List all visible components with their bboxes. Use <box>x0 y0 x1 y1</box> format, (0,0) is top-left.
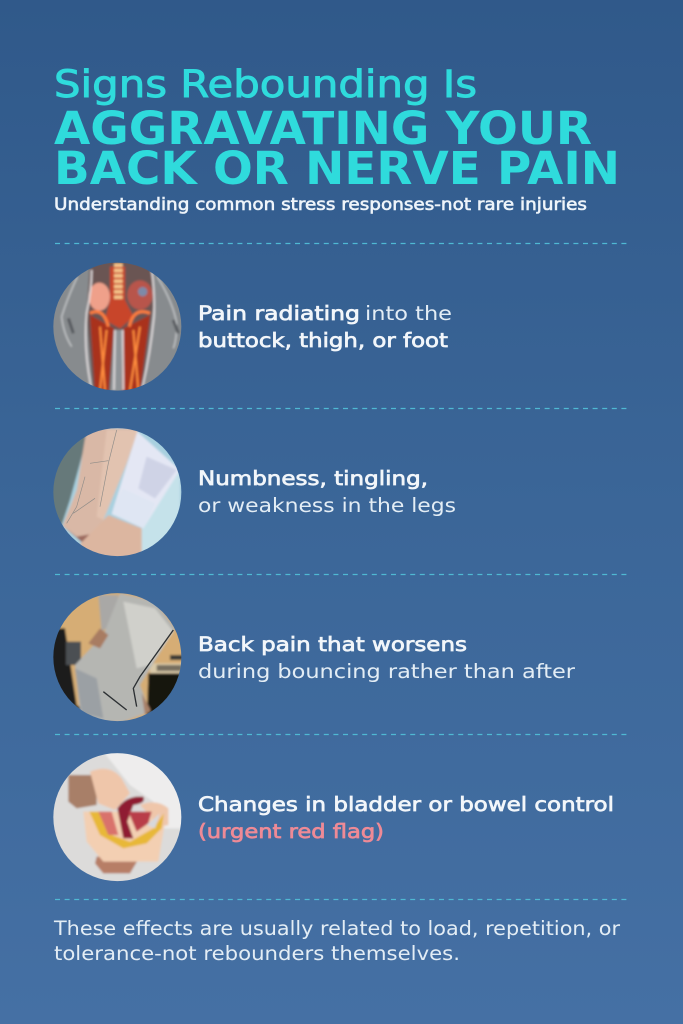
text: Back pain that worsens: Back pain that worsens <box>198 633 467 656</box>
footer line 1: These effects are usually related to load, repetition, or <box>53 917 621 940</box>
icon: leg with compression sleeve photo <box>50 427 187 560</box>
item 2: numbness <box>50 427 456 560</box>
item 4: bladder or bowel <box>50 752 614 885</box>
item 3: back pain <box>50 592 576 725</box>
icon: pelvis and legs x-ray photo <box>50 260 187 393</box>
subtitle: Understanding common stress responses-not rare injuries <box>54 195 587 214</box>
item 2 text <box>198 467 456 517</box>
text: Numbness, tingling,: Numbness, tingling, <box>198 467 428 490</box>
item 1 text <box>198 302 452 352</box>
text: during bouncing rather than after: during bouncing rather than after <box>198 660 576 683</box>
footer line 2: tolerance-not rebounders themselves. <box>54 942 460 965</box>
title <box>54 63 620 195</box>
item 3 text <box>198 633 576 683</box>
icon: anatomical pelvic model in hands photo <box>50 752 187 885</box>
title line: Aggravating your: AGGRAVATING YOUR <box>54 102 592 155</box>
icon: person holding lower back photo <box>50 592 187 725</box>
text: into the: into the <box>365 302 452 325</box>
item 4 text <box>198 793 614 843</box>
text: or weakness in the legs: or weakness in the legs <box>198 494 456 517</box>
text: Pain radiating: Pain radiating <box>198 302 360 325</box>
title line: Back or nerve pain: BACK OR NERVE PAIN <box>54 142 620 195</box>
footer note <box>53 917 621 965</box>
text: Changes in bladder or bowel control: Changes in bladder or bowel control <box>198 793 614 816</box>
title line: Signs Rebounding Is: Signs Rebounding Is <box>54 63 477 106</box>
text: urgent red flag: (urgent red flag) <box>198 820 384 843</box>
item 1: radiating pain <box>50 260 452 393</box>
text: buttock, thigh, or foot: buttock, thigh, or foot <box>198 329 448 352</box>
